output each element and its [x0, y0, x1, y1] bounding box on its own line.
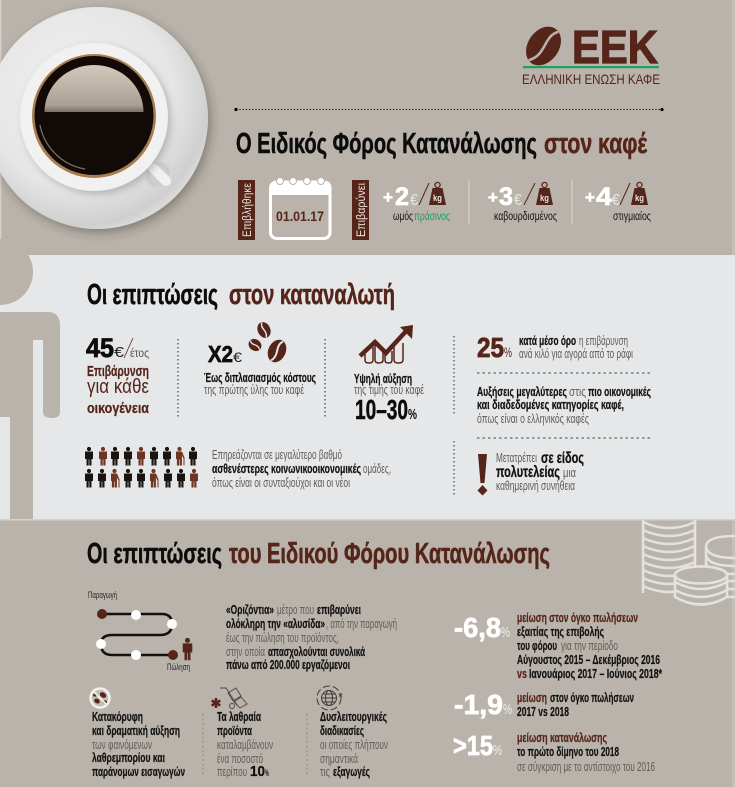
- label: imposed: Επιβλήθηκε: [240, 182, 254, 237]
- stat: minus 6.8 percent: για την περίοδο: [561, 639, 618, 653]
- stat: minus 1.9 percent: στον όγκο πωλήσεων: [550, 691, 634, 705]
- tax: instant coffee: [585, 182, 651, 223]
- callout: luxury item: πολυτελείας: [496, 464, 560, 481]
- icon: coffee bean: [519, 20, 568, 72]
- stat: minus 6.8 percent: του φόρου: [517, 639, 557, 653]
- label: burdens: Επιβαρύνει: [354, 183, 368, 237]
- callout: luxury item: [478, 450, 584, 496]
- icon: calendar: [270, 178, 331, 238]
- stat: minus 1.9 percent: [454, 689, 634, 720]
- tax: green coffee: [383, 182, 450, 223]
- text: vulnerable groups: Επηρεάζονται σε μεγαλύτερο βαθμό: [212, 448, 342, 462]
- icon: calendar: 01.01.17: [276, 209, 324, 224]
- diagram: supply chain: Παραγωγή: [88, 590, 117, 600]
- text: vulnerable groups: ομάδες,: [363, 462, 391, 476]
- stat: cost doubled: €: [233, 349, 242, 365]
- icon: globe: [317, 686, 342, 710]
- stat: minus 6.8 percent: εξαιτίας της επιβολής: [517, 625, 604, 639]
- text: vulnerable groups: ασθενέστερες κοινωνικοοικονομικές: [212, 462, 361, 476]
- heading: tax impact: [87, 538, 550, 570]
- stat: price increase: [354, 325, 424, 425]
- stat: over 15 percent: σε σύγκριση με το αντίστοιχο του 2016: [517, 760, 655, 774]
- text: larger increases: όπως είναι ο ελληνικός καφές: [477, 412, 589, 426]
- stat: 25 percent: ανά κιλό για αγορά από το ράφι: [519, 347, 633, 361]
- tax: roasted coffee: καβουρδισμένος: [494, 209, 557, 223]
- column: dysfunctional processes: διαδικασίες: [320, 724, 364, 738]
- column: smuggling surge: παράνομων εισαγωγών: [92, 765, 185, 779]
- text: vulnerable groups: όπως είναι οι συνταξιούχοι και οι νέοι: [212, 476, 350, 490]
- stat: minus 6.8 percent: vs: [517, 667, 527, 681]
- text: horizontal measure: [226, 603, 397, 672]
- stat: price increase: 10–30: [355, 394, 408, 425]
- stat: minus 1.9 percent: -1,9: [454, 689, 503, 720]
- column: illicit products: 10: [250, 763, 265, 780]
- tax: green coffee: kg: [433, 193, 442, 203]
- column: illicit products: [212, 688, 273, 780]
- stat: minus 6.8 percent: [454, 611, 662, 681]
- tax: roasted coffee: kg: [540, 193, 549, 203]
- text: horizontal measure: έως την πώληση του προϊόντος,: [226, 631, 339, 645]
- stat: over 15 percent: μείωση κατανάλωσης: [517, 731, 607, 745]
- column: illicit products: ένα ποσοστό: [217, 752, 263, 766]
- tax: roasted coffee: +: [488, 188, 498, 207]
- tax: instant coffee: +: [585, 188, 595, 207]
- tax: green coffee: 2: [395, 183, 409, 211]
- tax: roasted coffee: €: [514, 192, 522, 209]
- stat: 45 euro per year: οικογένεια: [87, 401, 149, 417]
- icon: coin stacks: [643, 520, 735, 604]
- title: στον καφέ: [544, 128, 648, 160]
- heading: consumer impact: [87, 279, 395, 311]
- stat: 45 euro per year: για κάθε: [87, 376, 149, 398]
- icon: no beans: [90, 688, 110, 708]
- column: dysfunctional processes: εξαγωγές: [333, 765, 370, 779]
- tax: green coffee: πράσινος: [414, 209, 450, 223]
- text: larger increases: [477, 385, 651, 426]
- stat: over 15 percent: >15: [453, 730, 493, 761]
- icon: rising arrow chart: [360, 325, 413, 363]
- stat: cost doubled: [204, 320, 316, 397]
- stat: 25 percent: [477, 332, 633, 363]
- callout: luxury item: σε είδος: [541, 450, 584, 467]
- text: larger increases: πιο οικονομικές: [588, 385, 651, 399]
- dotted divider: [234, 108, 664, 111]
- column: smuggling surge: και δραματική αύξηση: [92, 724, 180, 738]
- icon: person silhouette: [0, 239, 60, 519]
- text: horizontal measure: πάνω από 200.000 εργαζόμενοι: [226, 658, 350, 672]
- logo subtitle: ΕΛΛΗΝΙΚΗ ΕΝΩΣΗ ΚΑΦΕ: [522, 71, 660, 87]
- stat: minus 6.8 percent: μείωση στον όγκο πωλήσεων: [517, 611, 638, 625]
- text: larger increases: και διαδεδομένες κατηγορίες καφέ,: [477, 398, 624, 412]
- column: illicit products: προϊόντα: [217, 724, 252, 738]
- tax: roasted coffee: 3: [499, 183, 513, 211]
- column: smuggling surge: λαθρεμπορίου και: [92, 751, 165, 765]
- text: horizontal measure: , από την παραγωγή: [326, 617, 397, 631]
- stat: over 15 percent: το πρώτο δίμηνο του 2018: [517, 745, 619, 759]
- column: dysfunctional processes: τις: [320, 765, 330, 779]
- diagram: supply chain: Πώληση: [167, 662, 190, 672]
- stat: over 15 percent: [453, 730, 655, 774]
- heading: consumer impact: στον καταναλωτή: [229, 279, 395, 311]
- text: horizontal measure: «Οριζόντια»: [226, 603, 274, 617]
- stat: 45 euro per year: €: [114, 344, 125, 361]
- column: smuggling surge: Κατακόρυφη: [92, 710, 143, 724]
- stat: minus 6.8 percent: Αύγουστος 2015 – Δεκέμβριος 2016: [517, 653, 660, 667]
- column: smuggling surge: [90, 688, 185, 779]
- text: horizontal measure: μέτρο που: [277, 603, 314, 617]
- stat: minus 1.9 percent: μείωση: [517, 691, 547, 705]
- icon: coffee cup: [0, 7, 208, 229]
- text: horizontal measure: στην οποία: [226, 645, 265, 659]
- heading: tax impact: Οι επιπτώσεις: [87, 538, 222, 570]
- text: vulnerable groups: [212, 448, 391, 490]
- stat: minus 6.8 percent: %: [501, 624, 510, 641]
- icon: people row: [85, 447, 198, 488]
- tax: instant coffee: kg: [635, 193, 644, 203]
- stat: cost doubled: Έως διπλασιασμός κόστους: [204, 371, 316, 385]
- column: dysfunctional processes: Δυσλειτουργικές: [320, 710, 387, 724]
- stat: minus 1.9 percent: %: [503, 701, 512, 718]
- callout: luxury item: μια: [563, 466, 576, 480]
- title: Ο Ειδικός Φόρος Κατανάλωσης: [236, 128, 537, 160]
- stat: minus 6.8 percent: -6,8: [454, 612, 501, 643]
- stat: price increase: της τιμής του καφέ: [354, 383, 424, 397]
- stat: 25 percent: κατά μέσο όρο: [519, 334, 576, 348]
- stat: minus 1.9 percent: 2017 vs 2018: [517, 705, 569, 719]
- icon: exclamation mark: [478, 454, 488, 496]
- stat: 45 euro per year: 45: [86, 333, 114, 363]
- tax: instant coffee: στιγμιαίος: [613, 209, 651, 223]
- tax: green coffee: ωμός: [393, 209, 413, 223]
- tax: green coffee: +: [383, 188, 393, 207]
- tax: instant coffee: €: [612, 192, 620, 209]
- diagram: supply chain: [88, 590, 192, 672]
- stat: price increase: Υψηλή αύξηση: [354, 372, 412, 386]
- stat: minus 6.8 percent: Ιανουάριος 2017 – Ιούνιος 2018*: [529, 667, 662, 681]
- callout: luxury item: Μετατρέπει: [496, 451, 537, 465]
- stat: over 15 percent: %: [493, 742, 502, 759]
- logo letters: ΕΕΚ: [572, 21, 658, 73]
- panel: consumer impact: [0, 239, 735, 520]
- stat: price increase: %: [408, 406, 417, 423]
- stat: cost doubled: X2: [208, 341, 233, 367]
- heading: tax impact: του Ειδικού Φόρου Κατανάλωσης: [229, 538, 550, 570]
- tax: roasted coffee: [488, 182, 557, 223]
- logo: [519, 20, 660, 87]
- icon: coffee beans: [246, 320, 290, 365]
- heading: consumer impact: Οι επιπτώσεις: [87, 279, 218, 311]
- column: dysfunctional processes: [317, 686, 388, 779]
- icon: hand truck: [220, 688, 247, 708]
- stat: 45 euro per year: [86, 333, 149, 417]
- text: horizontal measure: απασχολούνται συνολικά: [268, 645, 365, 659]
- text: larger increases: Αυξήσεις μεγαλύτερες: [477, 385, 567, 399]
- column: smuggling surge: των φαινόμενων: [92, 738, 152, 752]
- column: dysfunctional processes: οι οποίες πλήττουν: [320, 738, 388, 752]
- tax: instant coffee: 4: [596, 183, 612, 211]
- column: illicit products: καταλαμβάνουν: [217, 738, 273, 752]
- column: illicit products: περίπου: [217, 765, 247, 779]
- column: illicit products: Τα λαθραία: [217, 710, 261, 724]
- callout: luxury item: καθημερινή συνήθεια: [496, 479, 575, 493]
- icon: asterisk: [212, 698, 220, 708]
- stat: 25 percent: %: [504, 344, 512, 360]
- stat: 45 euro per year: έτος: [130, 346, 149, 360]
- stat: 45 euro per year: Επιβάρυνση: [87, 364, 149, 380]
- tax: green coffee: €: [410, 192, 418, 209]
- stat: 25 percent: η επιβάρυνση: [579, 334, 628, 348]
- text: larger increases: στις: [569, 385, 586, 399]
- stat: 25 percent: 25: [477, 332, 504, 363]
- column: dysfunctional processes: σημαντικά: [320, 752, 358, 766]
- column: illicit products: %: [265, 768, 269, 778]
- stat: cost doubled: της πρώτης ύλης του καφέ: [204, 383, 304, 397]
- text: horizontal measure: ολόκληρη την «αλυσίδα»: [226, 617, 325, 631]
- text: horizontal measure: επιβαρύνει: [317, 603, 361, 617]
